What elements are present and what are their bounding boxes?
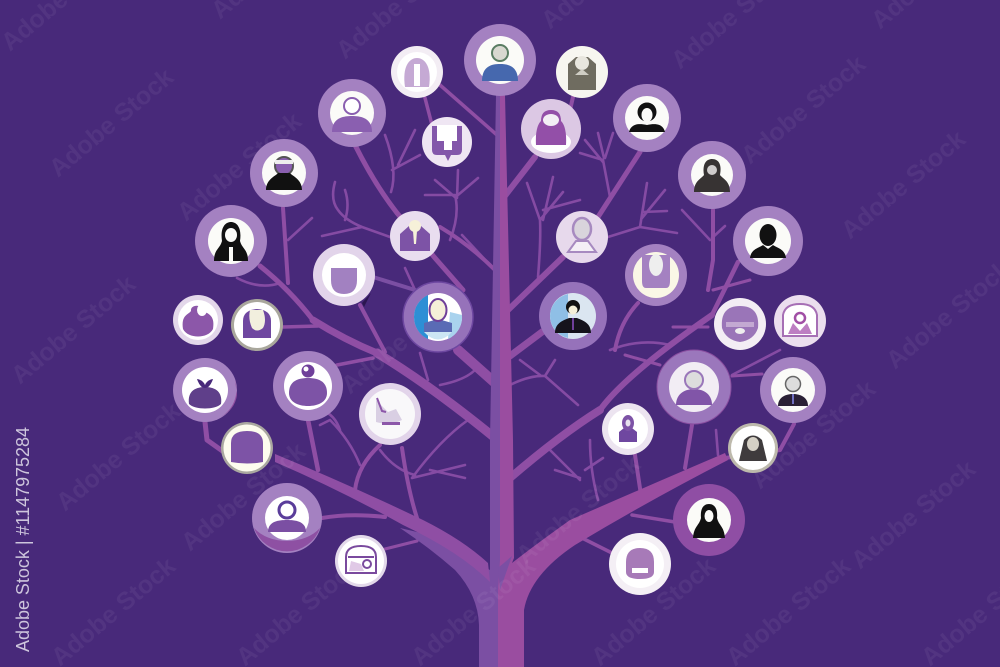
watermark: Adobe Stock [846, 455, 981, 575]
node: far left white [173, 295, 223, 345]
node: inner right outline [556, 211, 608, 263]
node: center right blue businessman [539, 282, 607, 350]
node: bottom left emblem [335, 535, 387, 587]
node: tablet shape [422, 117, 472, 167]
node: light purple person [521, 99, 581, 159]
node: center lower right [602, 403, 654, 455]
watermark: Adobe Stock [51, 397, 186, 517]
node: top left small [391, 46, 443, 98]
node: far left lower [173, 358, 237, 422]
node: lower left person [252, 483, 322, 553]
lower left limb [275, 454, 490, 582]
watermark: Adobe Stock [736, 50, 871, 170]
node: lower right black person [673, 484, 745, 556]
node: inner left purple [390, 211, 440, 261]
node: left long hair person [195, 205, 267, 277]
stock id: Adobe Stock | #1147975284 [13, 427, 33, 652]
watermark: Adobe Stock [6, 270, 141, 390]
node: right hooded person [678, 141, 746, 209]
node: white tuft [359, 383, 421, 445]
node: right black silhouette [733, 206, 803, 276]
node: far right lilac emblem [774, 295, 826, 347]
node: gray ring right [728, 423, 778, 473]
trunk junction shading [498, 556, 512, 590]
node: far right person [760, 357, 826, 423]
node: upper left person [318, 79, 386, 147]
watermark: Adobe Stock [511, 450, 646, 570]
trunk left side and under-limb shading [400, 95, 500, 667]
tree twigs [237, 130, 780, 500]
node: right large person [657, 350, 731, 424]
node: round heart [273, 351, 343, 421]
node: cream left [221, 422, 273, 474]
watermark: Adobe Stock [44, 63, 179, 183]
node: center left blue businessman [403, 282, 473, 352]
trunk right side and lower right limb [498, 95, 728, 667]
people nodes [173, 24, 826, 595]
node: right white blob [714, 298, 766, 350]
watermark: Adobe Stock [836, 125, 971, 245]
node: left black person [250, 139, 318, 207]
node: gray ring left [231, 299, 283, 351]
watermark: Adobe Stock [176, 437, 311, 557]
branches [205, 85, 794, 553]
node: upper right black person [613, 84, 681, 152]
node: top right small [556, 46, 608, 98]
watermark: Adobe Stock [746, 375, 881, 495]
node: bib left [313, 244, 375, 307]
watermark: Adobe Stock [336, 280, 471, 400]
node: bottom right white [609, 533, 671, 595]
watermark: Adobe Stock [172, 107, 307, 227]
node: top [464, 24, 536, 96]
tree [205, 85, 794, 667]
node: cream right [625, 244, 687, 306]
